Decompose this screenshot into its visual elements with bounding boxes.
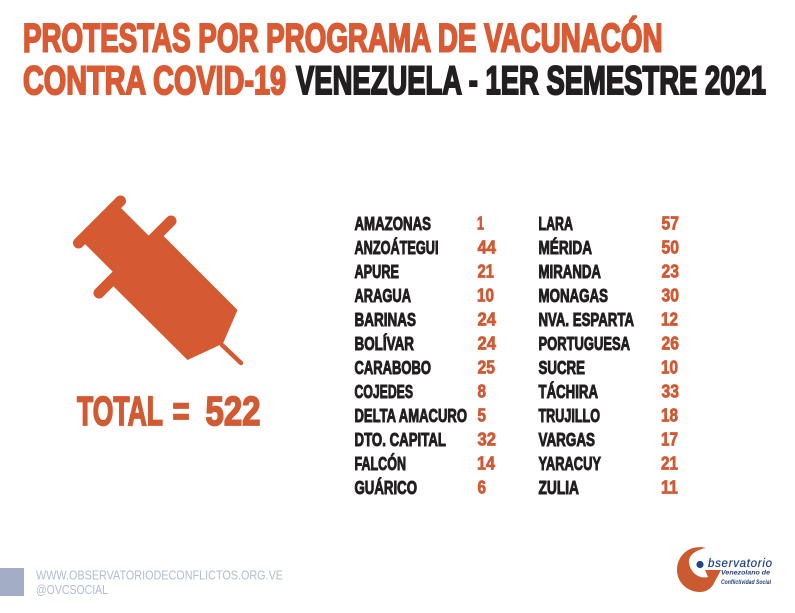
table: right column of states: MONAGAS (538, 286, 608, 306)
table: left column of states: 21 (478, 262, 494, 282)
table: left column of states: 25 (478, 358, 495, 378)
table: right column of states: PORTUGUESA (538, 334, 630, 354)
footer text: @OVCSOCIAL (36, 582, 108, 597)
table: right column of states: 57 (662, 214, 679, 234)
table: right column of states: 18 (661, 406, 678, 426)
logo: Observatorio Venezolano de Conflictividad Social: Conflictividad Social (721, 580, 771, 586)
logo: Observatorio Venezolano de Conflictividad Social: Venezolano de (721, 570, 770, 576)
table: left column of states: DTO. CAPITAL (354, 430, 446, 450)
table: left column of states: GUÁRICO (354, 477, 417, 498)
table: left column of states: 5 (478, 406, 486, 426)
total: 522 (206, 388, 260, 434)
table: right column of states: VARGAS (538, 430, 595, 450)
table: right column of states: MIRANDA (538, 262, 601, 282)
table: right column of states: 11 (661, 478, 678, 498)
footer square (0, 568, 24, 596)
footer text: WWW.OBSERVATORIODECONFLICTOS.ORG.VE (36, 568, 283, 582)
table: left column of states: FALCÓN (354, 453, 406, 474)
table: left column of states: 32 (478, 430, 496, 450)
table: right column of states: TÁCHIRA (538, 381, 598, 402)
table: left column of states: 8 (478, 382, 486, 402)
table: left column of states: 24 (478, 310, 496, 330)
table: right column of states: MÉRIDA (538, 237, 592, 258)
footer text (36, 568, 283, 597)
title: CONTRA COVID-19 (23, 59, 286, 103)
table: right column of states (538, 214, 679, 498)
table: right column of states: 50 (662, 238, 679, 258)
table: left column of states: 1 (477, 214, 484, 234)
table: right column of states: SUCRE (538, 358, 585, 378)
table: right column of states: 12 (661, 310, 678, 330)
icon: syringe (78, 201, 241, 363)
table: left column of states: 10 (477, 286, 494, 306)
table: left column of states: 24 (478, 334, 496, 354)
table: left column of states (354, 214, 496, 498)
table: right column of states: TRUJILLO (538, 406, 600, 426)
table: left column of states: 14 (477, 454, 495, 474)
total: = (172, 388, 190, 434)
table: left column of states: ANZOÁTEGUI (354, 237, 438, 258)
table: left column of states: 6 (478, 478, 486, 498)
table: right column of states: LARA (538, 214, 573, 234)
table: right column of states: YARACUY (538, 454, 601, 474)
table: right column of states: 17 (661, 430, 678, 450)
logo: Observatorio Venezolano de Conflictividad Social (677, 547, 773, 592)
table: right column of states: 33 (662, 382, 679, 402)
total: TOTAL (77, 388, 163, 434)
table: left column of states: BOLÍVAR (354, 333, 414, 354)
title (23, 14, 766, 103)
table: right column of states: 21 (661, 454, 678, 474)
table: left column of states: ARAGUA (354, 286, 411, 306)
table: right column of states: ZULIA (538, 478, 579, 498)
table: left column of states: DELTA AMACURO (354, 406, 467, 426)
table: left column of states: 44 (478, 238, 496, 258)
table: right column of states: NVA. ESPARTA (538, 310, 634, 330)
table: left column of states: AMAZONAS (354, 214, 431, 234)
table: left column of states: BARINAS (354, 310, 416, 330)
table: left column of states: COJEDES (354, 382, 413, 402)
table: left column of states: CARABOBO (354, 358, 431, 378)
table: right column of states: 23 (662, 262, 679, 282)
table: left column of states: APURE (354, 262, 399, 282)
logo: Observatorio Venezolano de Conflictividad Social: bservatorio (708, 558, 773, 570)
table: right column of states: 10 (661, 358, 678, 378)
table: right column of states: 26 (662, 334, 679, 354)
table: right column of states: 30 (662, 286, 679, 306)
